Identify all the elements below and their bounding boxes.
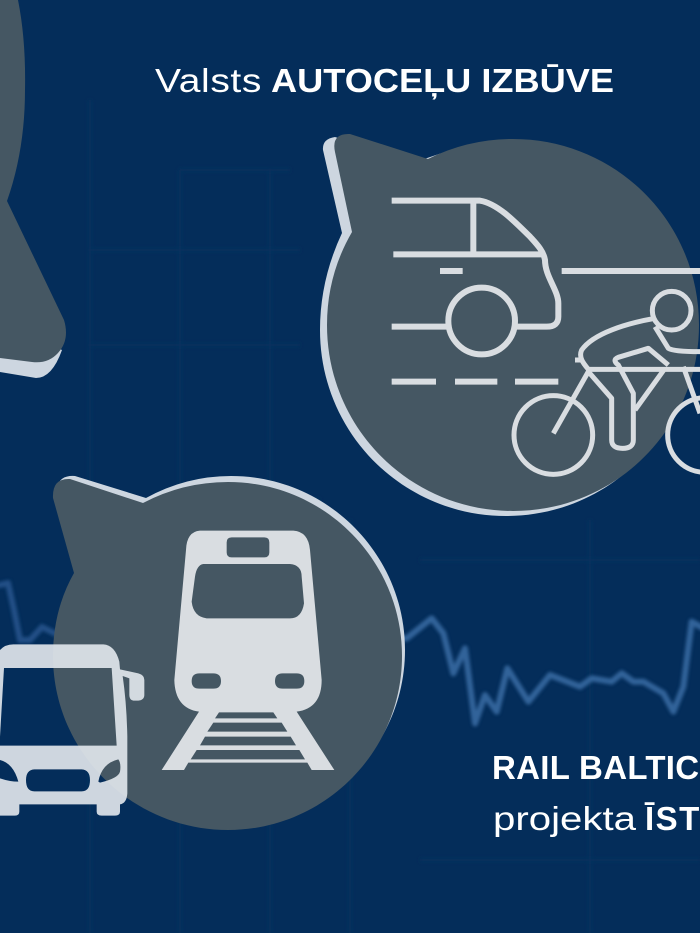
bubble body bbox=[53, 479, 402, 830]
text: Rail Baltica project bbox=[492, 749, 700, 837]
text: Rail Baltica project: projekta bbox=[493, 800, 637, 837]
icon: train bbox=[162, 531, 334, 770]
bubble body bbox=[327, 134, 699, 511]
icon: bus bbox=[0, 644, 144, 816]
title: road construction: Valsts bbox=[155, 62, 262, 99]
line chart: background trend line bbox=[0, 583, 700, 723]
speech bubble: public transport bbox=[0, 476, 405, 830]
title: road construction: AUTOCEĻU IZBŪVE bbox=[271, 62, 614, 99]
bubble highlight edge bbox=[57, 476, 405, 824]
icon: cyclist bbox=[514, 291, 700, 474]
title: road construction bbox=[155, 62, 614, 99]
speech bubble: road with car and cyclist bbox=[320, 134, 700, 516]
speech bubble: left, cropped bbox=[0, 0, 66, 378]
icon: car bbox=[392, 201, 700, 382]
bubble shadow edge bbox=[320, 137, 692, 516]
